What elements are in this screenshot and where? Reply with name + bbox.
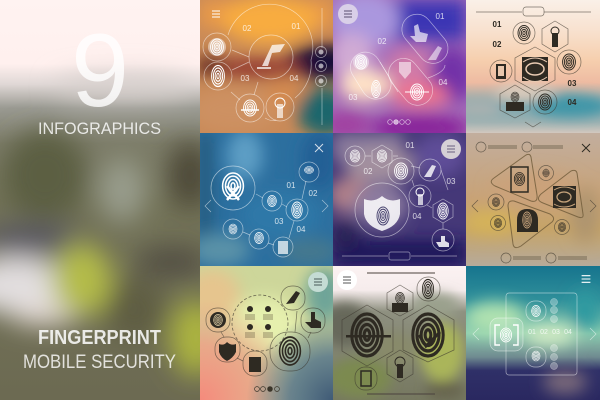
top and bottom legends [476,142,587,263]
center hand icon circle [249,35,293,79]
step numbers: 02 [309,189,318,198]
step numbers: 03 [552,329,560,336]
infographic 9: teal frame [473,276,596,375]
close icon [582,144,590,152]
menu icon [212,11,220,17]
step numbers: 02 [540,329,548,336]
panel: fingerprint tan [462,133,600,266]
connectors [365,156,448,229]
close icon [315,144,323,152]
menu button [308,272,328,292]
step numbers: 02 [493,40,502,49]
step numbers [364,141,456,221]
infographic 1: orange circle [203,4,326,125]
step numbers: 04 [297,225,306,234]
fingerprint heading: FINGERPRINT [38,327,161,349]
infographic 2: violet capsules [338,4,454,124]
mobile security subheading: MOBILE SECURITY [23,352,176,373]
step numbers: 02 [378,37,387,46]
infographic 5: dusk shield [342,139,461,260]
navigation arrows [205,200,328,212]
panel: fingerprint peach [452,0,600,133]
menu button [441,139,461,159]
bottom slider [342,252,457,260]
infographics label: INFOGRAPHICS [38,119,161,138]
large numeral: 9 [71,13,129,129]
cover text [23,13,176,373]
panel: fingerprint landscape [320,266,466,400]
scan bracket tile [490,318,523,351]
orbit and connectors [228,4,322,125]
step numbers: 02 [364,167,373,176]
menu button [337,270,357,290]
step numbers: 01 [436,12,445,21]
center hexagon with eye print [515,47,555,91]
top and bottom captions [367,272,435,395]
step numbers [349,12,448,102]
navigation arrows [472,200,596,212]
step numbers: 04 [439,78,448,87]
small hexagons and circles [355,277,440,390]
navigation arrows [473,328,596,340]
outer frame [506,293,577,375]
small icon circles [488,166,570,234]
connectors [243,181,306,245]
top rule and tag [476,7,591,16]
rounded triangles [491,154,583,248]
capsule outlines [345,8,454,111]
step numbers: 01 [287,181,296,190]
down chevron [525,122,541,127]
dashed center circle [232,295,288,351]
step numbers: 03 [447,177,456,186]
fingerprint and hand icons [353,24,442,100]
step numbers [493,20,577,107]
step numbers: 01 [292,22,301,31]
large fingerprint circle [211,166,255,210]
panel: fingerprint violet [333,0,466,133]
step numbers: 04 [413,212,422,221]
infographic 6: tan triangles [472,142,596,263]
panel: fingerprint dusk [328,133,466,266]
shield circle [355,183,409,237]
step numbers [528,329,572,336]
pagination dots [388,120,410,124]
step numbers: 03 [241,74,250,83]
step markers [245,306,273,338]
step numbers: 04 [564,329,572,336]
icon circles [345,145,454,251]
menu button [338,4,358,24]
panel: cover background [0,0,222,400]
connectors [221,311,311,361]
large scanner hexagon [342,305,393,366]
infographic 4: blue network [205,144,328,257]
step numbers: 03 [349,93,358,102]
small icon circles [223,162,319,257]
infographic 3: peach hexagons [476,7,591,127]
pagination dots [255,387,279,391]
panel: fingerprint blue [200,133,333,266]
step numbers: 01 [493,20,502,29]
step numbers: 01 [406,141,415,150]
panel: fingerprint teal [465,266,600,400]
fingerprint circles [203,33,294,122]
tablet fingerprint [511,167,528,192]
legend dots [550,298,558,370]
infographic 8: landscape hexagons [337,270,454,395]
step numbers: 03 [275,217,284,226]
side icons [316,46,326,86]
large check hexagon [403,305,454,362]
step numbers: 02 [243,24,252,33]
eye print tile [553,186,576,208]
step numbers: 04 [568,98,577,107]
upper and lower bubbles [526,301,546,367]
step numbers [241,22,301,83]
step numbers [275,181,318,234]
icon bubbles [206,286,325,376]
step numbers: 01 [528,329,536,336]
step numbers: 03 [568,79,577,88]
panel: fingerprint orange [200,0,333,133]
panel: fingerprint pastel [200,266,333,400]
step numbers: 04 [290,74,299,83]
infographic 7: pastel bubbles [206,272,328,391]
arch fingerprint [517,209,538,232]
menu icon [582,276,590,282]
surrounding icons [490,21,581,118]
